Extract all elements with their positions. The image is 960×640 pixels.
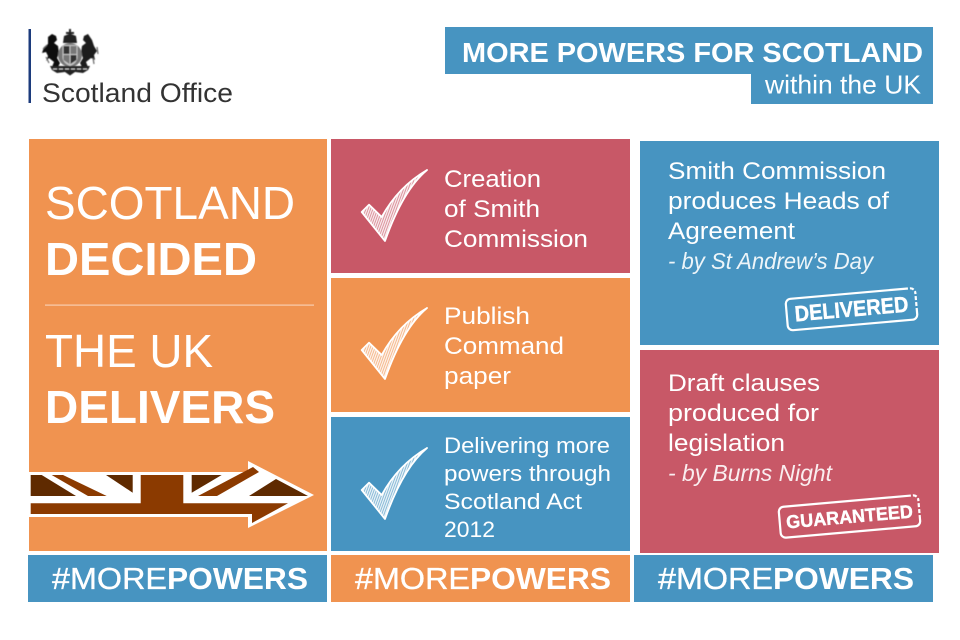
heading: Scotland decided — [45, 177, 295, 285]
text block — [444, 433, 611, 542]
stamp: guaranteed — [778, 495, 921, 538]
hashtag bar: centre: #MORE — [355, 562, 470, 596]
text block: 2012 — [444, 517, 495, 542]
panel: draft clauses produced for legislation — [640, 350, 939, 553]
panel: Smith Commission Heads of Agreement — [640, 141, 939, 345]
hashtag bar: right — [634, 555, 933, 602]
text block: - by Burns Night — [668, 460, 834, 486]
text block: Delivering more — [444, 433, 610, 458]
text block: Command — [444, 333, 564, 360]
title text: MORE POWERS FOR SCOTLAND — [462, 37, 923, 68]
text block: Agreement — [668, 218, 795, 245]
hashtag bar: right: POWERS — [773, 562, 914, 596]
hashtag bar: centre — [331, 555, 630, 602]
icon: royal coat of arms — [42, 29, 98, 76]
text block: Smith Commission — [668, 158, 886, 185]
heading: the UK delivers — [45, 325, 275, 433]
panel: publish Command paper — [331, 278, 630, 412]
text block: paper — [444, 363, 511, 390]
text block: of Smith — [444, 196, 540, 223]
panel: creation of Smith Commission — [331, 139, 630, 273]
stamp: guaranteed: GUARANTEED — [785, 501, 914, 532]
logo wordmark: Scotland Office — [42, 78, 233, 108]
hashtag bar: centre: POWERS — [470, 562, 611, 596]
heading: Scotland decided: SCOTLAND — [45, 177, 295, 229]
text block: legislation — [668, 430, 785, 457]
logo: Scotland Office — [28, 29, 233, 108]
heading: the UK delivers: THE UK — [45, 325, 213, 377]
panel: delivering more powers through Scotland Act 2012 — [331, 417, 630, 551]
title banner — [445, 27, 933, 104]
text block: Creation — [444, 166, 541, 193]
heading: Scotland decided: DECIDED — [45, 233, 257, 285]
text block — [444, 303, 564, 390]
text block: produced for — [668, 400, 819, 427]
text block: produces Heads of — [668, 188, 889, 215]
hashtag bar: left — [28, 555, 327, 602]
icon: tick — [362, 308, 427, 379]
heading: the UK delivers: DELIVERS — [45, 381, 275, 433]
text block — [668, 158, 889, 274]
icon: union flag arrow — [29, 461, 314, 528]
text block — [444, 166, 588, 253]
text block: Publish — [444, 303, 530, 330]
text block: - by St Andrew’s Day — [668, 248, 874, 274]
hashtag bar: left: #MORE — [52, 562, 167, 596]
text block: Scotland Act — [444, 489, 582, 514]
text block — [668, 370, 834, 486]
subtitle text: within the UK — [764, 70, 922, 100]
icon: tick — [362, 170, 427, 241]
text block: Draft clauses — [668, 370, 820, 397]
text block: Commission — [444, 226, 588, 253]
hashtag bar: right: #MORE — [658, 562, 773, 596]
text block: powers through — [444, 461, 611, 486]
hashtag bar: left: POWERS — [167, 562, 308, 596]
stamp: delivered: DELIVERED — [794, 292, 909, 326]
icon: tick — [362, 448, 427, 519]
panel: Scotland decided, the UK delivers — [29, 139, 327, 551]
